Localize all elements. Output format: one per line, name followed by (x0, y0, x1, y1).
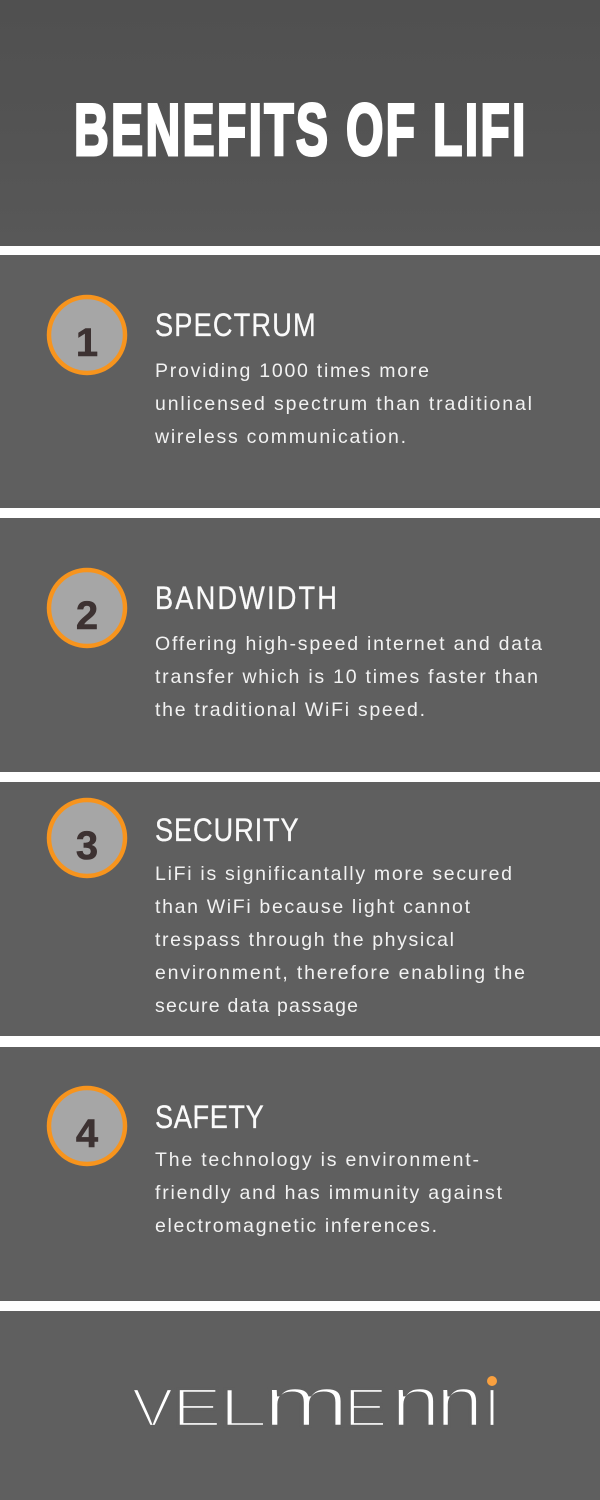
text block: security: environment, therefore enabling the (155, 962, 525, 984)
logo: velmenni: L (218, 1377, 268, 1438)
logo: velmenni: m (263, 1363, 349, 1441)
icon: number 1: 1 (76, 321, 98, 365)
text block: safety (155, 1149, 503, 1237)
text block: bandwidth (155, 633, 542, 721)
text block: security: trespass through the physical (155, 929, 454, 951)
text block: bandwidth: Offering high-speed internet and data (155, 633, 542, 655)
text block: safety: friendly and has immunity against (155, 1182, 503, 1204)
heading: security: SECURITY (155, 813, 299, 849)
logo: velmenni: V (132, 1378, 173, 1438)
icon: number 1 (49, 297, 125, 373)
header panel (0, 0, 600, 246)
heading: spectrum: SPECTRUM (155, 308, 316, 344)
panel: security (0, 782, 600, 1036)
heading: bandwidth: BANDWIDTH (155, 581, 337, 617)
icon: number 3: 3 (76, 824, 98, 868)
text block: safety: electromagnetic inferences. (155, 1215, 437, 1237)
heading: safety: SAFETY (155, 1100, 264, 1136)
text block: security: secure data passage (155, 995, 358, 1017)
logo: velmenni: n (391, 1362, 441, 1441)
text block: spectrum (154, 360, 532, 448)
title: BENEFITS OF LIFI (74, 90, 525, 172)
icon: number 4: 4 (76, 1112, 99, 1156)
logo: velmenni: I (484, 1378, 500, 1438)
logo: velmenni: n (436, 1364, 483, 1441)
logo: velmenni: E (172, 1377, 222, 1438)
icon: number 3 (49, 800, 125, 876)
text block: security: LiFi is significantally more secured (155, 863, 512, 885)
icon: number 4 (49, 1088, 125, 1164)
panel: safety (0, 1047, 600, 1301)
icon: orange dot (487, 1376, 497, 1386)
text block: bandwidth: the traditional WiFi speed. (155, 699, 425, 721)
logo: velmenni (132, 1362, 500, 1441)
text block: safety: The technology is environment- (155, 1149, 479, 1171)
icon: number 2: 2 (76, 594, 98, 638)
text block: bandwidth: transfer which is 10 times faster than (155, 666, 538, 688)
panel: spectrum (0, 255, 600, 508)
logo: velmenni: E (344, 1377, 387, 1438)
panel: bandwidth (0, 518, 600, 772)
icon: number 2 (49, 570, 125, 646)
text block: security: than WiFi because light cannot (155, 896, 471, 918)
text block: spectrum: Providing 1000 times more (155, 360, 429, 382)
text block: spectrum: unlicensed spectrum than traditional (155, 393, 532, 415)
text block: security (155, 863, 525, 1017)
text block: spectrum: wireless communication. (154, 426, 406, 448)
